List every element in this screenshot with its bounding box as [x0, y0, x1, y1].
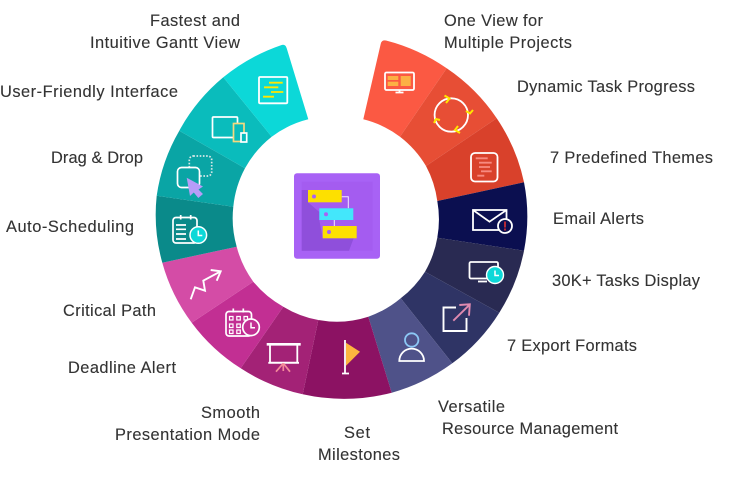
icon: themes document: [471, 153, 498, 182]
icon: email alert: [473, 210, 512, 233]
icon: monitor: [385, 72, 414, 92]
label: Fastest and Intuitive Gantt View: Intuitive Gantt View: [90, 34, 240, 52]
panel: Set Milestones: [303, 317, 392, 399]
icon: calendar with clock: [226, 308, 259, 336]
label: Smooth Presentation Mode: [115, 404, 260, 444]
icon: person: [399, 333, 424, 361]
label: Email Alerts: Email Alerts: [553, 210, 644, 228]
label: Fastest and Intuitive Gantt View: Fastest and: [150, 12, 240, 30]
icon: drag and drop cursor: [178, 156, 212, 198]
panel: Drag & Drop: [157, 131, 245, 207]
label: 7 Export Formats: 7 Export Formats: [507, 337, 637, 355]
panel: One View for Multiple Projects: [363, 40, 447, 137]
panel: Email Alerts: [437, 182, 527, 251]
label: Smooth Presentation Mode: Smooth: [201, 404, 260, 422]
label: User-Friendly Interface: User-Friendly Interface: [0, 83, 178, 101]
label: Auto-Scheduling: Auto-Scheduling: [6, 218, 134, 236]
label: Dynamic Task Progress: Dynamic Task Progress: [517, 78, 695, 96]
label: 30K+ Tasks Display: 30K+ Tasks Display: [552, 272, 701, 290]
panel: Critical Path: [162, 247, 253, 323]
icon: milestone flag: [342, 340, 360, 374]
label: 7 Predefined Themes: 7 Predefined Themes: [550, 149, 713, 167]
icon: monitor with clock: [470, 262, 504, 284]
panel: Smooth Presentation Mode: [241, 307, 318, 394]
icon: cycle arrows: [434, 96, 473, 133]
icon: trending arrow: [191, 270, 221, 299]
label: Set Milestones: Milestones: [318, 446, 400, 464]
center logo: [294, 173, 380, 259]
panel: Dynamic Task Progress: [400, 68, 497, 166]
label: Fastest and Intuitive Gantt View: [90, 12, 240, 52]
icon: presentation screen: [267, 344, 301, 372]
label: One View for Multiple Projects: [444, 12, 572, 52]
panel: Fastest and Intuitive Gantt View: [223, 45, 308, 137]
label: One View for Multiple Projects: One View for: [444, 12, 544, 30]
panel: User-Friendly Interface: [179, 77, 272, 168]
panel: 30K+ Tasks Display: [425, 238, 524, 313]
panel: Auto-Scheduling: [156, 196, 237, 263]
label: Deadline Alert: Deadline Alert: [68, 359, 176, 377]
icon: responsive devices: [212, 117, 247, 142]
panel: Versatile Resource Management: [368, 298, 452, 393]
label: Set Milestones: Set: [344, 424, 370, 442]
label: Set Milestones: [318, 424, 400, 464]
label: Versatile Resource Management: Resource Management: [442, 420, 618, 438]
panel: Deadline Alert: [192, 282, 283, 368]
label: Drag & Drop: Drag & Drop: [51, 149, 143, 167]
icon: export arrow: [444, 304, 470, 331]
icon: gantt view: [259, 77, 287, 103]
label: Versatile Resource Management: Versatile: [438, 398, 505, 416]
panel: 7 Export Formats: [401, 272, 499, 363]
label: Smooth Presentation Mode: Presentation Mode: [115, 426, 260, 444]
label: Versatile Resource Management: [438, 398, 618, 438]
panel: 7 Predefined Themes: [426, 118, 524, 201]
icon: schedule calendar: [173, 215, 207, 243]
label: One View for Multiple Projects: Multiple Projects: [444, 34, 572, 52]
label: Critical Path: Critical Path: [63, 302, 156, 320]
